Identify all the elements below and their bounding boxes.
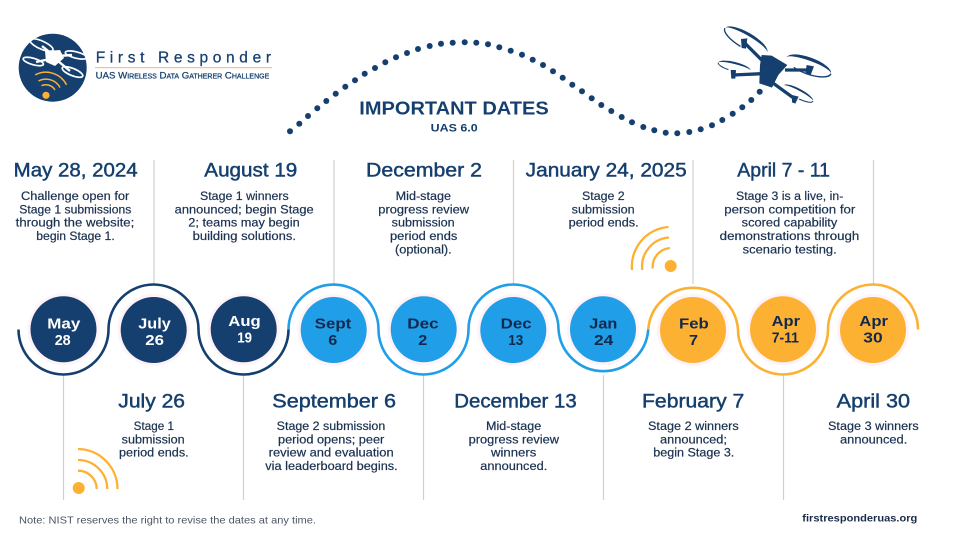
- panel: July 26: period ends.: [119, 448, 189, 460]
- panel: December 13: [454, 391, 577, 473]
- node: Jan 24: 24: [594, 332, 614, 349]
- panel: December 13: Mid-stage: [486, 421, 541, 433]
- node: July 26: 26: [145, 332, 164, 349]
- node: Aug 19: 19: [237, 329, 252, 346]
- panel: August 19: announced; begin Stage: [175, 204, 314, 216]
- panel: December 13: progress review: [469, 434, 560, 446]
- panel: April 7 - 11: Stage 3 is a live, in-: [736, 191, 843, 203]
- node: Sept 6: 6: [328, 332, 337, 349]
- panel: September 6: period opens; peer: [278, 434, 384, 446]
- logo rule: [95, 67, 272, 68]
- panel: September 6: review and evaluation: [269, 448, 394, 460]
- panel: December 2: period ends: [390, 231, 458, 243]
- panel: December 13: December 13: [454, 391, 577, 412]
- panel: July 26: Stage 1: [134, 421, 174, 433]
- panel: December 2: progress review: [378, 204, 470, 216]
- panel: August 19: Stage 1 winners: [200, 191, 289, 203]
- panel: July 26: submission: [122, 434, 185, 446]
- node: Aug 19: [208, 293, 280, 365]
- node: Feb 7: Feb: [679, 315, 709, 332]
- panel: April 7 - 11: demonstrations through: [720, 231, 859, 243]
- panel: February 7: announced;: [660, 434, 727, 446]
- node: Apr 30: 30: [863, 329, 883, 346]
- panel: February 7: Stage 2 winners: [648, 421, 739, 433]
- footnote: Note: NIST reserves the right to revise the dates at any time.: [19, 514, 316, 526]
- panel: January 24, 2025: Stage 2: [582, 191, 625, 203]
- panel: December 2: December 2: [366, 161, 482, 182]
- node: May 28: [28, 293, 100, 365]
- node: Apr 7-11: [747, 293, 819, 365]
- panel: April 7 - 11: [720, 161, 859, 256]
- panel: July 26: [118, 391, 189, 460]
- connector lines: [64, 160, 874, 500]
- node: Dec 2: 2: [418, 332, 427, 349]
- panel: August 19: building solutions.: [193, 231, 296, 243]
- logo tagline: UAS Wireless Data Gatherer Challenge: [96, 70, 270, 81]
- icon: signal waves top: [632, 227, 677, 272]
- panel: August 19: [175, 161, 314, 243]
- panel: August 19: 2; teams may begin: [188, 218, 300, 230]
- panel: February 7: February 7: [642, 391, 744, 412]
- node: Dec 2: Dec: [407, 315, 439, 332]
- panel: April 7 - 11: person competition for: [724, 204, 855, 216]
- node: May 28: 28: [55, 332, 71, 349]
- panel: April 30: April 30: [837, 391, 910, 412]
- node: Apr 7-11: 7-11: [772, 329, 799, 346]
- panel: September 6: Stage 2 submission: [277, 421, 385, 433]
- panel: May 28, 2024: Stage 1 submissions: [19, 204, 132, 216]
- node: Apr 30: [837, 294, 909, 366]
- panel: September 6: via leaderboard begins.: [265, 461, 398, 473]
- panel: April 7 - 11: April 7 - 11: [737, 161, 830, 182]
- logo emblem: [19, 34, 87, 102]
- panel: April 7 - 11: scored capability: [742, 218, 838, 230]
- node: Sept 6: Sept: [315, 315, 351, 332]
- node: Dec 13: [477, 294, 549, 366]
- panel: May 28, 2024: begin Stage 1.: [36, 231, 115, 243]
- panel: February 7: [642, 391, 744, 460]
- icon: drone: [717, 21, 834, 105]
- node: Jan 24: [567, 293, 639, 365]
- panel: April 7 - 11: scenario testing.: [743, 244, 837, 256]
- dotted flight path: [287, 39, 763, 136]
- node: Jan 24: Jan: [589, 315, 617, 332]
- node: Feb 7: 7: [689, 332, 698, 349]
- panel: September 6: [265, 391, 398, 473]
- panel: April 30: [828, 391, 919, 446]
- panel: May 28, 2024: through the website;: [16, 218, 134, 230]
- panel: May 28, 2024: Challenge open for: [21, 191, 129, 203]
- node: Dec 13: Dec: [501, 315, 532, 332]
- title: IMPORTANT DATES: [359, 97, 549, 118]
- panel: May 28, 2024: May 28, 2024: [14, 161, 138, 182]
- logo: First Responder UAS Challenge: [19, 34, 272, 102]
- node: July 26: July: [138, 315, 171, 332]
- logo wordmark: First Responder: [96, 49, 271, 66]
- node: Dec 13: 13: [508, 332, 523, 349]
- node: Dec 2: [388, 293, 460, 365]
- panel: February 7: begin Stage 3.: [653, 448, 734, 460]
- panel: April 30: announced.: [840, 434, 907, 446]
- panel: January 24, 2025: [526, 161, 687, 230]
- node: July 26: [118, 294, 190, 366]
- timeline track: [18, 284, 918, 374]
- icon: signal waves bottom: [73, 449, 118, 494]
- node: May 28: May: [47, 315, 81, 332]
- panel: December 13: announced.: [480, 461, 547, 473]
- panel: July 26: July 26: [118, 391, 185, 412]
- website: firstresponderuas.org: [802, 513, 917, 525]
- node: Apr 7-11: Apr: [772, 313, 800, 330]
- panel: December 2: (optional).: [395, 244, 452, 256]
- node: Aug 19: Aug: [228, 313, 261, 330]
- panel: August 19: August 19: [204, 161, 297, 182]
- panel: April 30: Stage 3 winners: [828, 421, 919, 433]
- panel: December 13: winners: [490, 448, 537, 460]
- panel: December 2: submission: [392, 218, 455, 230]
- node: Apr 30: Apr: [859, 313, 888, 330]
- panel: May 28, 2024: [14, 161, 138, 243]
- panel: January 24, 2025: submission: [572, 204, 635, 216]
- node: Feb 7: [657, 294, 729, 366]
- panel: January 24, 2025: January 24, 2025: [526, 161, 687, 182]
- panel: September 6: September 6: [272, 391, 396, 412]
- subtitle: UAS 6.0: [431, 123, 478, 135]
- node: Sept 6: [298, 294, 370, 366]
- panel: December 2: [366, 161, 482, 256]
- panel: January 24, 2025: period ends.: [569, 218, 639, 230]
- panel: December 2: Mid-stage: [396, 191, 451, 203]
